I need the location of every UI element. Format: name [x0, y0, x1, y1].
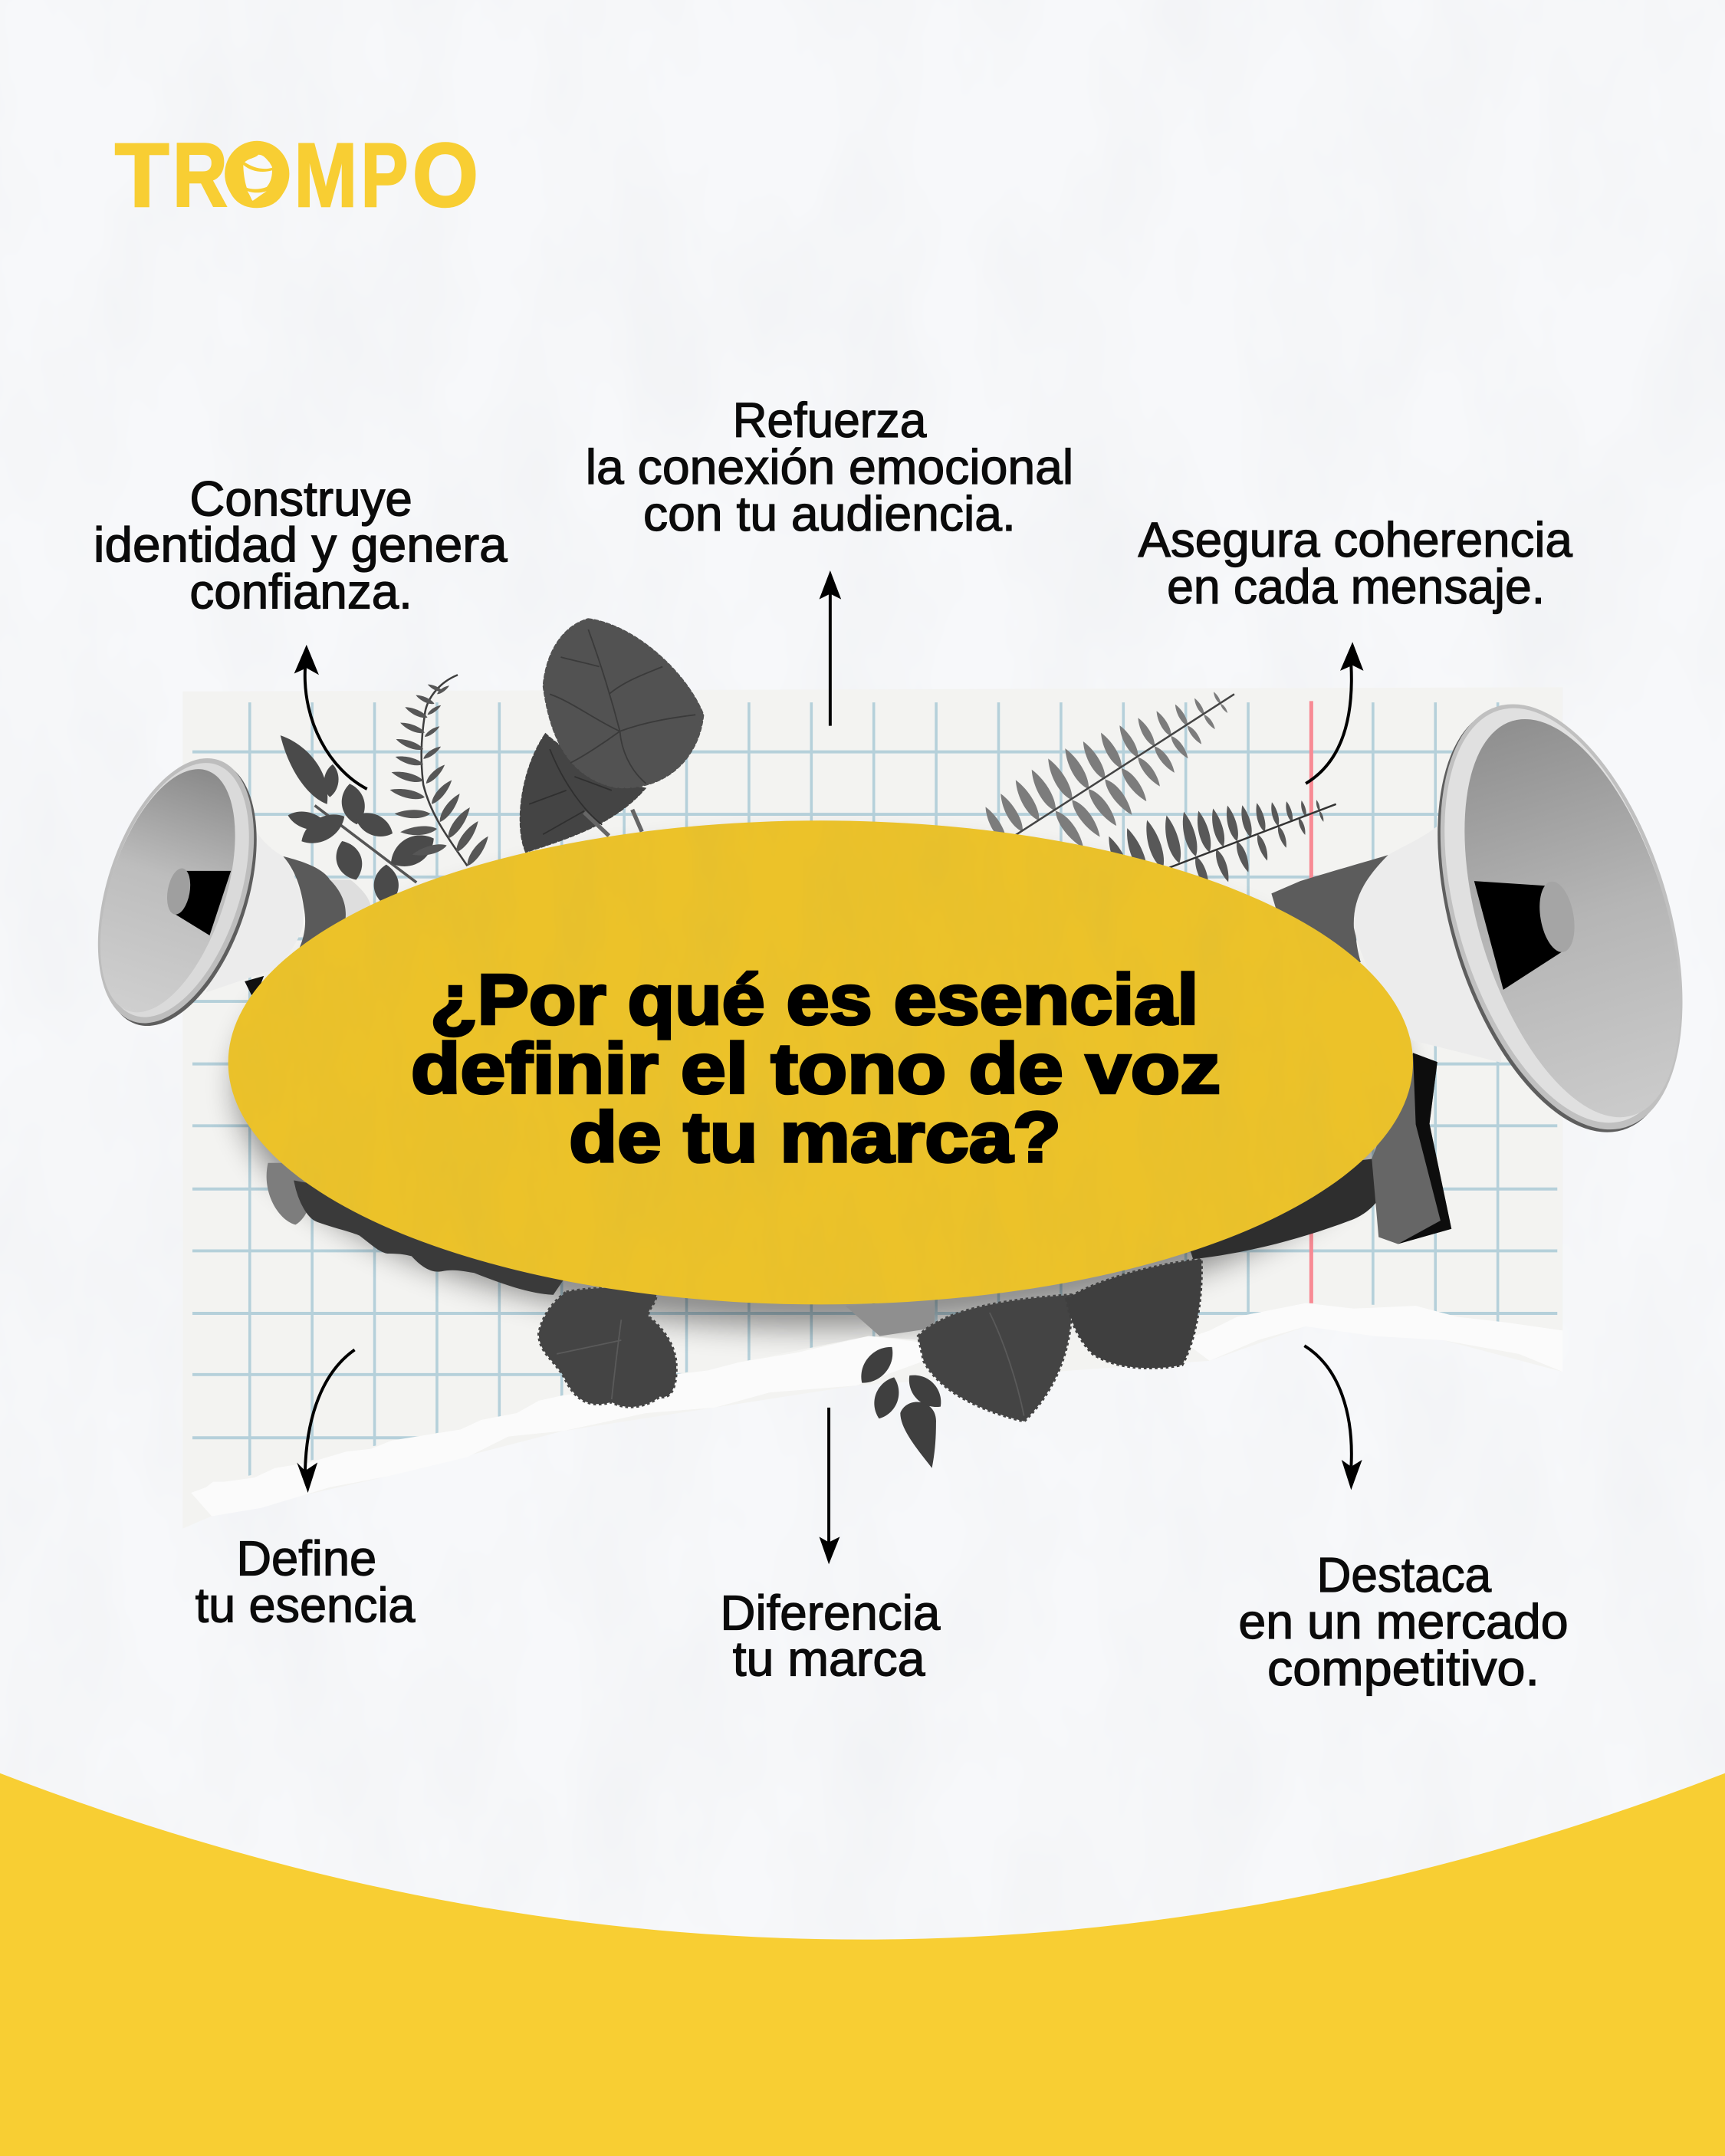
title: ¿Por qué es esencial [430, 960, 1198, 1040]
arrow: top centre [820, 570, 841, 726]
megaphone left [68, 739, 371, 1046]
text: destaca mercado: Destaca [1317, 1548, 1492, 1602]
title [411, 960, 1221, 1177]
text: define tu esencia: tu esencia [196, 1578, 416, 1632]
title: de tu marca? [569, 1097, 1061, 1177]
logo: TROMPO: T [115, 125, 169, 226]
arrow: bottom centre [820, 1408, 840, 1564]
logo: TROMPO: M [294, 125, 357, 226]
grid paper [182, 687, 1562, 1529]
arrow: bottom right [1304, 1346, 1362, 1490]
text: construye identidad [94, 472, 508, 619]
text: construye identidad: confianza. [189, 564, 412, 619]
text: destaca mercado [1238, 1548, 1569, 1696]
logo: TROMPO: R [172, 125, 228, 226]
plants: top right ferns [981, 691, 1336, 892]
logo: TROMPO: O [224, 125, 290, 226]
text: refuerza conexión: Refuerza [733, 393, 927, 448]
plants: dark leaves beneath ellipse [267, 1159, 1377, 1421]
text: diferencia tu marca: Diferencia [720, 1586, 941, 1640]
text: destaca mercado: en un mercado [1238, 1595, 1569, 1649]
plants: top centre leaves [521, 620, 702, 851]
text: define tu esencia: Define [236, 1532, 376, 1586]
text: define tu esencia [196, 1532, 416, 1632]
plants: top left sprig [281, 735, 441, 905]
yellow bottom band [0, 1773, 1725, 2156]
title: definir el tono de voz [411, 1028, 1221, 1108]
logo: TROMPO: P [361, 125, 408, 226]
arrow: top left [294, 645, 367, 789]
text: asegura coherencia [1138, 513, 1573, 614]
text: diferencia tu marca: tu marca [733, 1632, 925, 1686]
text: asegura coherencia: Asegura coherencia [1138, 513, 1573, 567]
text: asegura coherencia: en cada mensaje. [1167, 560, 1545, 614]
text: construye identidad: identidad y genera [94, 518, 508, 572]
logo: TROMPO: O [412, 125, 478, 226]
central yellow ellipse [228, 820, 1413, 1304]
logo: TROMPO [115, 125, 478, 226]
ellipse drop shadow [218, 1010, 1420, 1348]
text: diferencia tu marca [720, 1586, 941, 1686]
text: refuerza conexión [586, 393, 1073, 541]
text: refuerza conexión: con tu audiencia. [643, 487, 1016, 541]
megaphone right [1271, 675, 1725, 1244]
arrow: bottom left [297, 1350, 355, 1493]
arrow: top right [1306, 642, 1363, 784]
text: refuerza conexión: la conexión emocional [586, 440, 1073, 495]
plants: top left fern [389, 675, 491, 868]
text: destaca mercado: competitivo. [1267, 1642, 1539, 1696]
text: construye identidad: Construye [189, 472, 412, 526]
plants: bottom sprig [853, 1339, 948, 1468]
